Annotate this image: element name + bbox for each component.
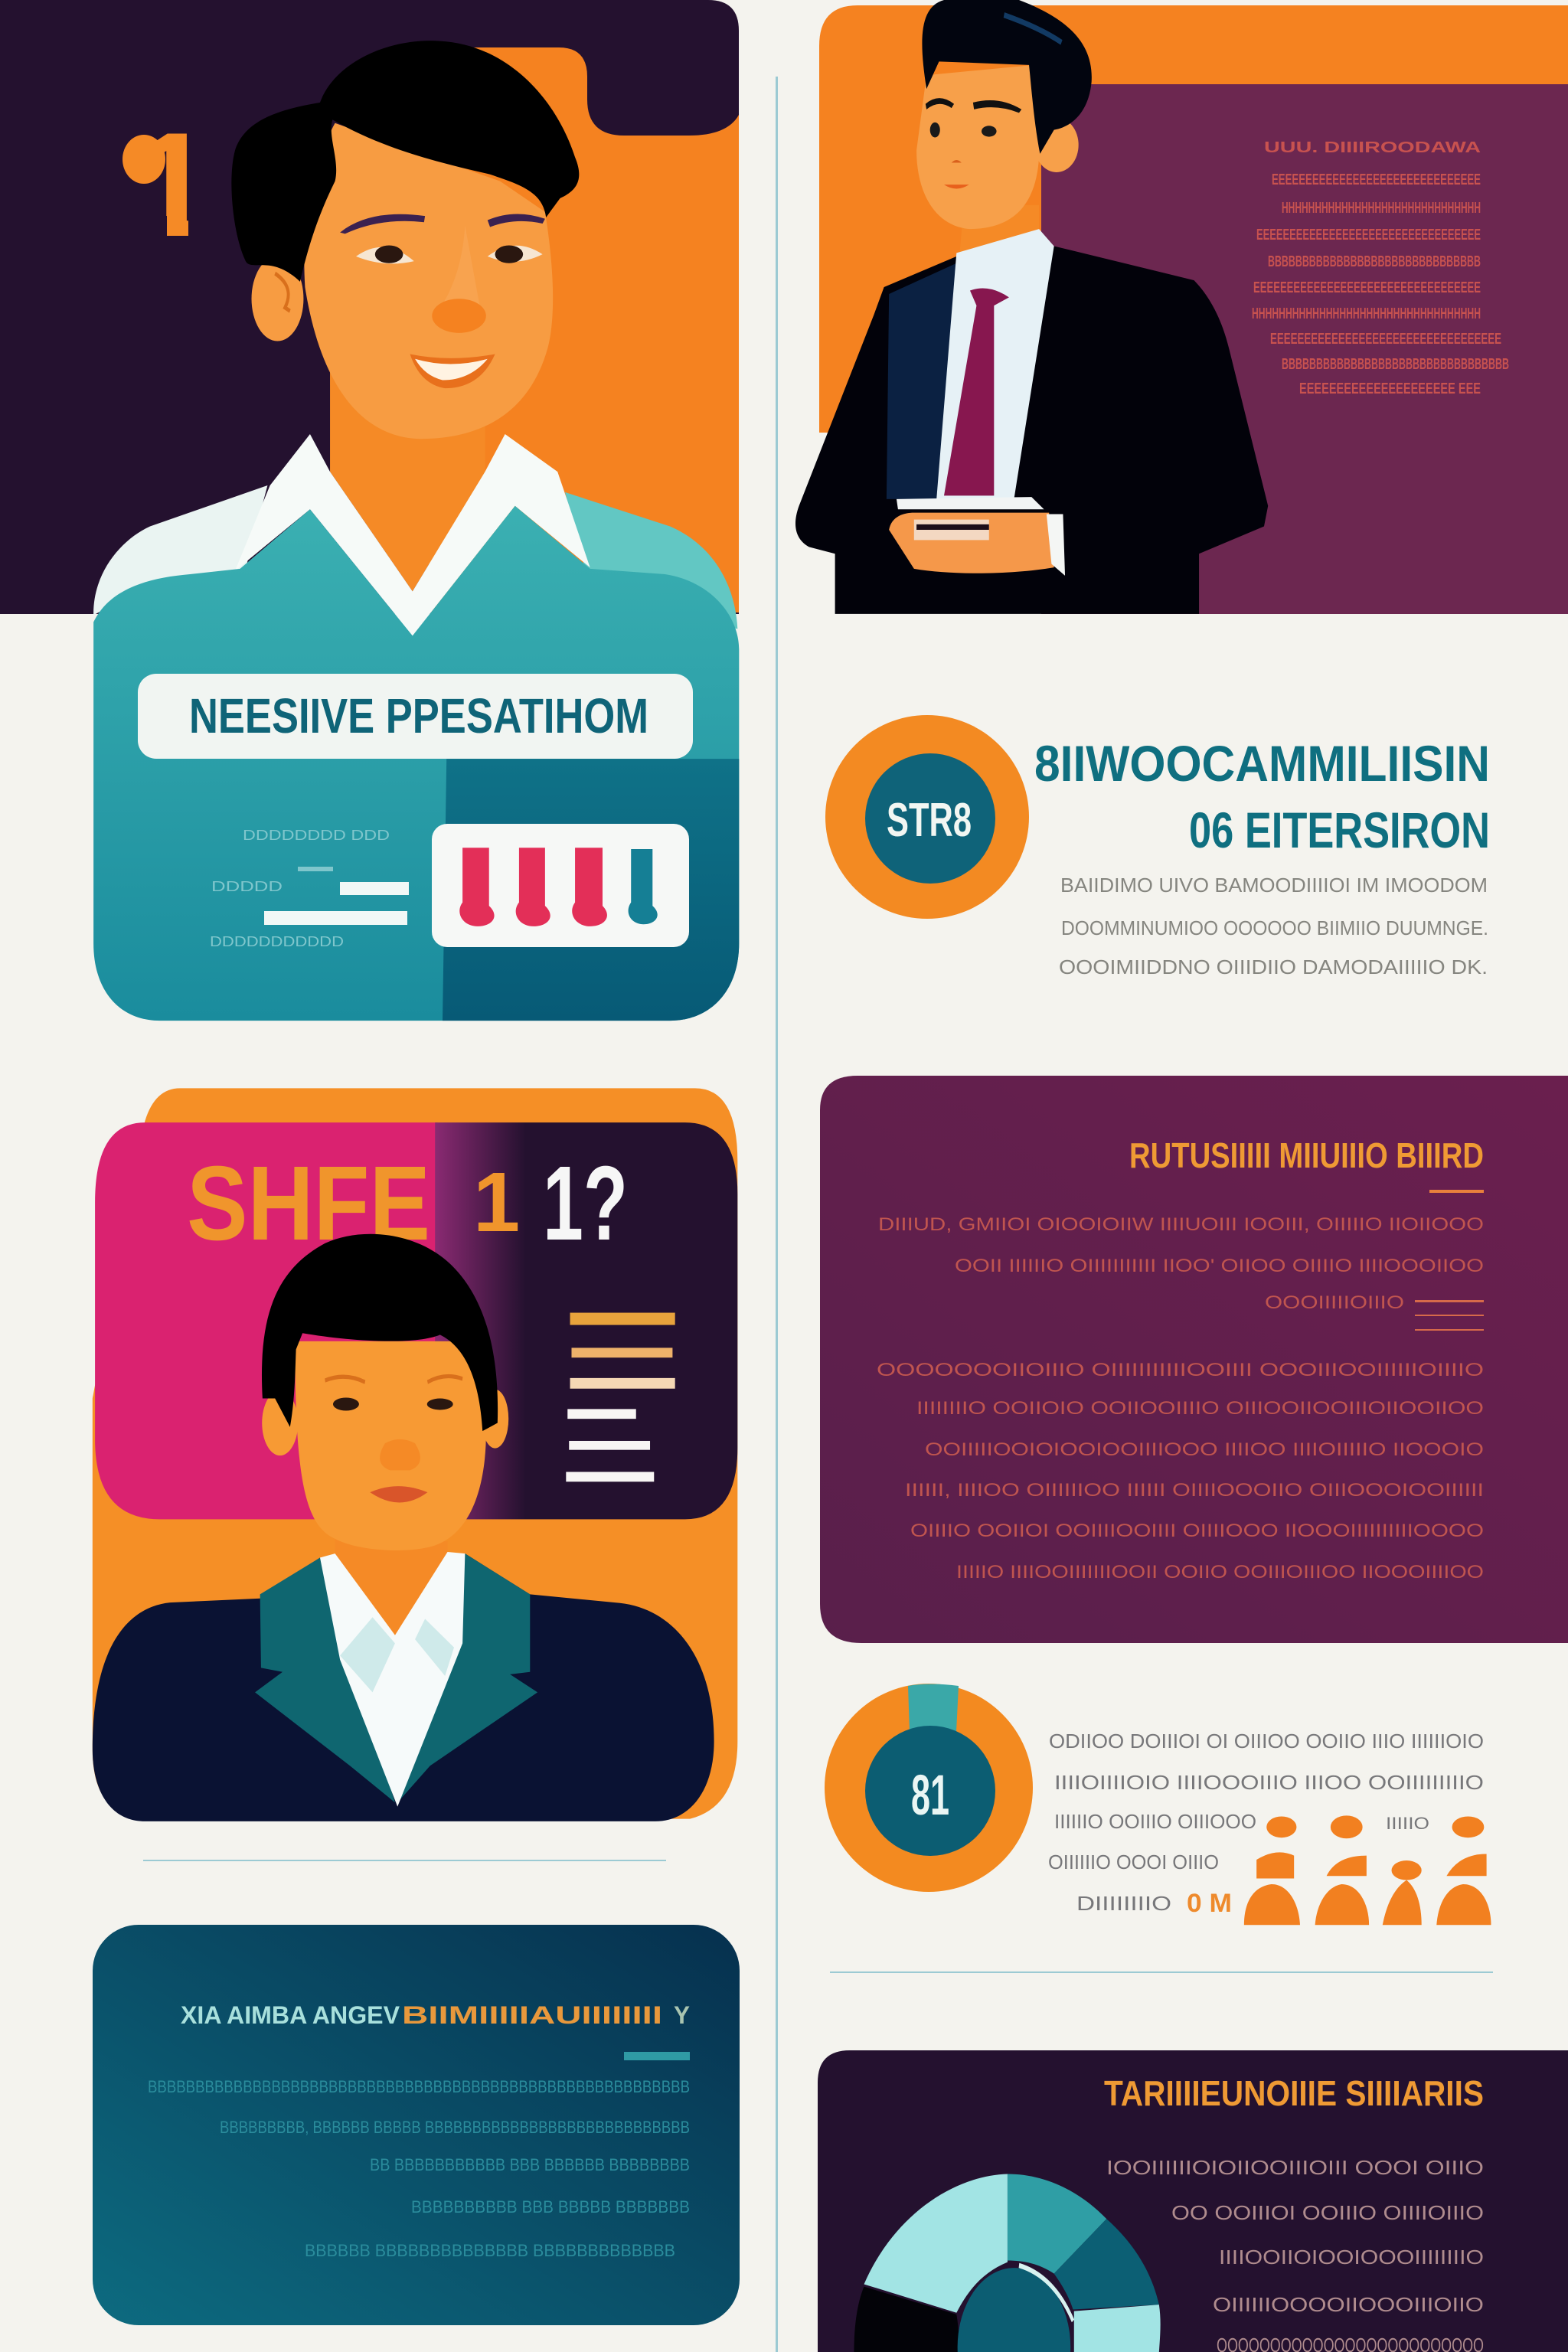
- right-aligned body copy: EEEEEEEEEEEEEEEEEEEEE EEE: [1299, 381, 1481, 397]
- orange number one: 1: [132, 102, 214, 268]
- orange band: [819, 5, 1568, 433]
- pie chart: [854, 2174, 1161, 2352]
- teal shirt card: [93, 506, 739, 1021]
- second paragraph: IIIIIO IIIIOOIIIIIIIOOII OOIIO OOIIIOIIIOO IIOOOIIIIOO: [956, 1562, 1484, 1583]
- card heading: [181, 2001, 690, 2029]
- description text: IIIIIIO OOIIIO OIIIOOO: [1054, 1810, 1256, 1833]
- large label: 1: [473, 1155, 520, 1250]
- first paragraph: DIIIUD, GMIIOI OIOOIOIIW IIIIUOIII IOOIII, OIIIIIO IIOIIOOO: [878, 1214, 1484, 1235]
- description text: OIIIIIIO OOOI OIIIO: [1048, 1851, 1219, 1873]
- mini bar chart card: [432, 824, 689, 947]
- card heading: BIIMIIIIIAUIIIIIIII: [402, 2001, 662, 2029]
- panel: dark pie card: [818, 2050, 1568, 2352]
- short rules: [1415, 1300, 1484, 1331]
- orange number one: [122, 133, 188, 236]
- section: donut with people: [825, 1684, 1491, 1925]
- small captions and bars: DDDDDDDD DDD: [243, 828, 390, 843]
- card body copy: BB BBBBBBBBBBB BBB BBBBBB BBBBBBBB: [370, 2155, 690, 2174]
- right-aligned body copy: [1252, 139, 1509, 397]
- panel: left portrait card: [93, 1088, 737, 1821]
- pie text: IOOIIIIIIOIOIIOOIIIOIII OOOI OIIIO: [1106, 2156, 1484, 2179]
- orange card: [93, 1088, 737, 1819]
- large label: [187, 1145, 628, 1263]
- second paragraph: OOIIIIIOOIOIOOIOOIIIIOOO IIIIOO IIIIOIIIIIO IIOOOIO: [925, 1439, 1484, 1460]
- large label: SHFE: [187, 1145, 430, 1263]
- second paragraph: IIIIII, IIIIOO OIIIIIIOO IIIIII OIIIIOOOIIO OIIIOOOIOOIIIIII: [905, 1480, 1484, 1501]
- circle badge: STR8: [887, 794, 972, 847]
- card body copy: BBBBBBBBBB BBB BBBBB BBBBBBB: [411, 2197, 690, 2216]
- description text: ODIIOO DOIIIOI OI OIIIOO OOIIO IIIO IIIIIIOIO: [1049, 1730, 1484, 1753]
- description text: IIIIIO: [1386, 1814, 1429, 1833]
- heading: 8IIWOOCAMMILIISIN: [1034, 735, 1490, 792]
- description text: DIIIIIIIIO: [1076, 1892, 1171, 1915]
- first paragraph: OOII IIIIIIO OIIIIIIIIIII IIOO' OIIOO OIIIIO IIIIOOOIIOO: [955, 1256, 1484, 1276]
- panel: top-left portrait: [0, 0, 739, 1021]
- first paragraph: [878, 1214, 1484, 1313]
- dark block: [435, 1122, 737, 1519]
- pie text: IIIIOOIIOIOOIOOOIIIIIIIIO: [1219, 2246, 1484, 2269]
- card body copy: BBBBBB BBBBBBBBBBBBBB BBBBBBBBBBBBB: [305, 2241, 675, 2260]
- description: BAIIDIMO UIVO BAMOODIIIIOI IM IMOODOM: [1060, 874, 1488, 897]
- panel: teal text card: [93, 1925, 740, 2325]
- right-aligned body copy: UUU. DIIIIROODAWA: [1264, 139, 1481, 156]
- pie heading: TARIIIIEUNOIIIE SIIIIARIIS: [1104, 2073, 1484, 2113]
- circle badge: [825, 715, 1029, 919]
- first paragraph: OOOIIIIIOIIIO: [1265, 1292, 1404, 1313]
- card body copy: BBBBBBBBB, BBBBBB BBBBB BBBBBBBBBBBBBBBBBBBBBBBBBBBB: [220, 2118, 690, 2137]
- accent line: [1429, 1190, 1484, 1193]
- second paragraph: OOOOOOOIIOIIIO OIIIIIIIIIIIOOIIII OOOIIIOOIIIIIIOIIIIO: [877, 1360, 1484, 1380]
- plum card heading: RUTUSIIIII MIIUIIIO BIIIRD: [1129, 1135, 1484, 1175]
- stat bars: [566, 1313, 675, 1481]
- card heading: Y: [674, 2001, 690, 2029]
- right column divider: [830, 1971, 1493, 1973]
- left column divider: [143, 1860, 666, 1861]
- panel: plum text card: [820, 1076, 1568, 1643]
- donut chart: 81: [911, 1763, 949, 1827]
- donut chart: [825, 1684, 1033, 1892]
- title pill: NEESIIVE PPESATIHOM: [189, 688, 648, 743]
- smiling man portrait: [93, 41, 737, 635]
- pink block: [95, 1122, 437, 1519]
- pie text: OIIIIIIOOOOIIOOOIIIOIIO: [1213, 2293, 1484, 2316]
- panel: top-right presenter: [795, 0, 1568, 614]
- second paragraph: IIIIIIIIO OOIIOIO OOIIOOIIIIO OIIIOOIIOOIIIOIIOOIIOO: [916, 1398, 1484, 1419]
- small captions and bars: DDDDD: [211, 879, 283, 894]
- description: DOOMMINUMIOO OOOOOO BIIMIIO DUUMNGE.: [1061, 916, 1488, 939]
- small captions and bars: [210, 828, 409, 949]
- heading: [1034, 735, 1490, 858]
- card body copy: [148, 2077, 690, 2260]
- description: [1059, 874, 1488, 978]
- heading: 06 EITERSIRON: [1189, 802, 1490, 858]
- accent bar: [624, 2052, 690, 2060]
- dark backdrop: [0, 0, 739, 614]
- second paragraph: [877, 1360, 1484, 1583]
- small captions and bars: DDDDDDDDDDD: [210, 934, 344, 949]
- pie text: OO OOIIIOI OOIIIO OIIIIOIIIO: [1171, 2201, 1484, 2224]
- description text: [1048, 1730, 1484, 1915]
- large label: 1?: [543, 1145, 628, 1263]
- second paragraph: OIIIIO OOIIOI OOIIIIOOIIII OIIIIOOO IIOOOIIIIIIIIIIOOOO: [910, 1521, 1484, 1541]
- orange figure label: 0 M: [1187, 1889, 1232, 1918]
- title pill: [138, 674, 693, 759]
- description text: IIIIOIIIIOIO IIIIOOOIIIO IIIOO OOIIIIIIIIIO: [1054, 1771, 1484, 1794]
- card heading: XIA AIMBA ANGEV: [181, 2001, 400, 2029]
- vertical column divider: [776, 77, 778, 2352]
- section: circle badge with heading: [825, 715, 1490, 978]
- orange backdrop with notch: [429, 47, 739, 612]
- pie text: [1106, 2156, 1484, 2352]
- suited man portrait: [93, 1234, 714, 1821]
- plum backdrop: [1041, 84, 1568, 614]
- people icons: [1244, 1815, 1491, 1925]
- description: OOOIMIIDDNO OIIIDIIO DAMODAIIIIIO DK.: [1059, 956, 1488, 978]
- card body copy: BBBBBBBBBBBBBBBBBBBBBBBBBBBBBBBBBBBBBBBBBBBBBBBBBBBBBBBBB: [148, 2077, 690, 2096]
- presenter figure: [795, 0, 1268, 614]
